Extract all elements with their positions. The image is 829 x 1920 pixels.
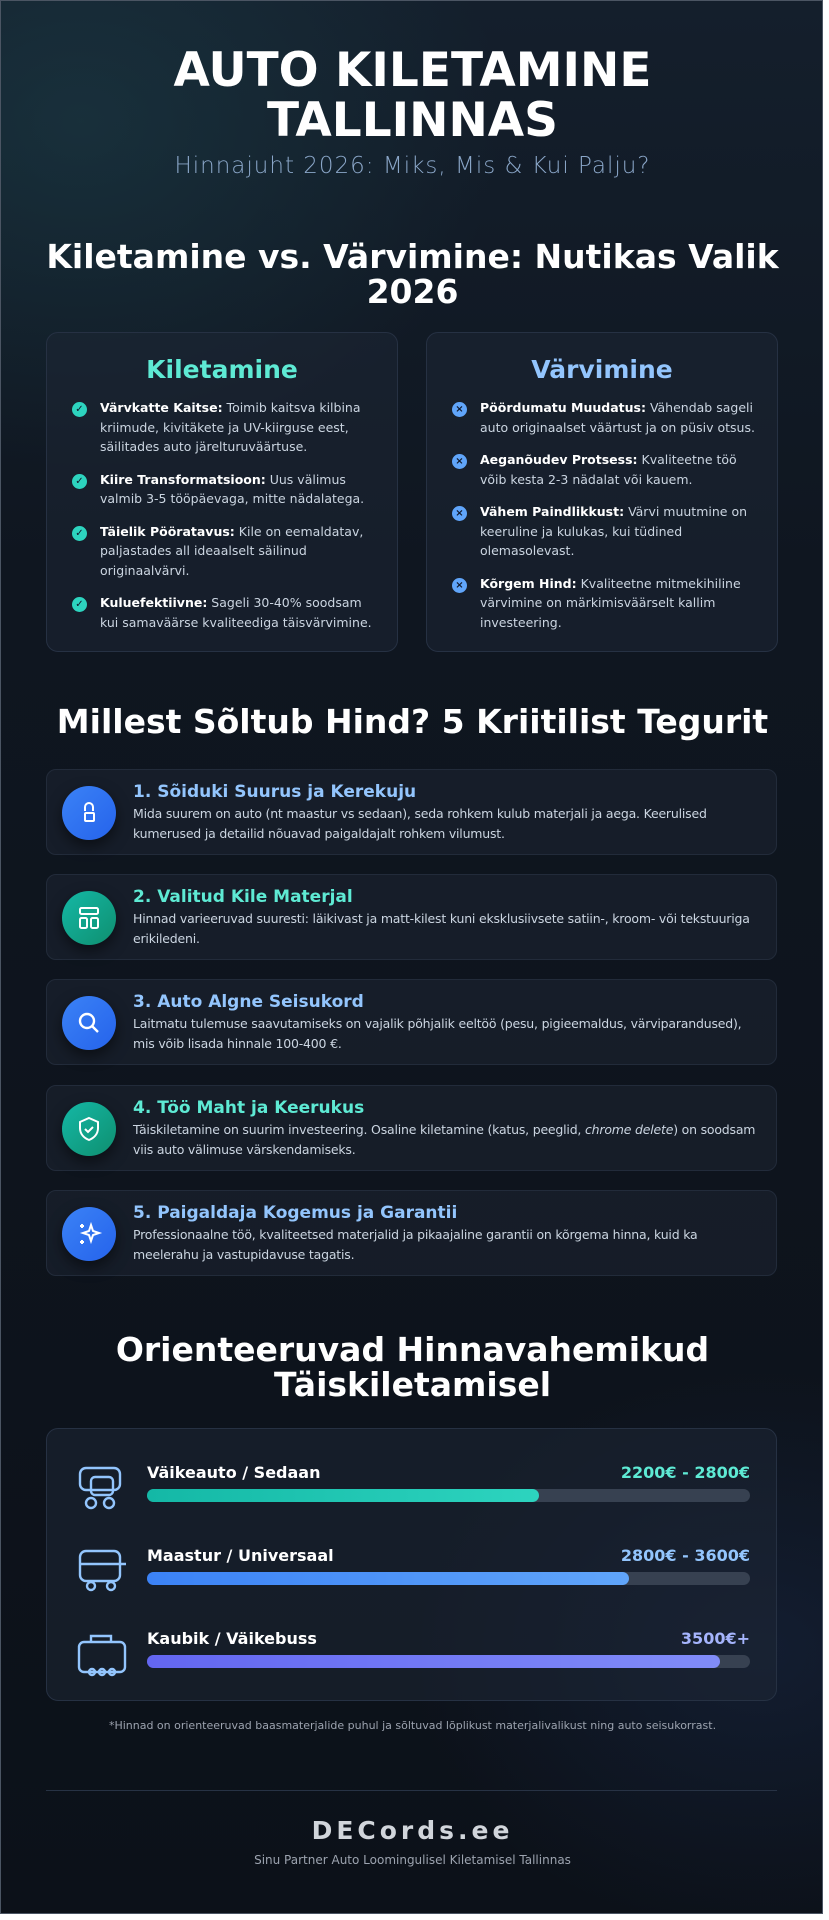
- row: kaubik: [78, 1629, 750, 1676]
- item: hind: ×: [455, 580, 464, 590]
- row: maastur: Maastur / Universaal: [147, 1546, 334, 1565]
- title: AUTO KILETAMINE: [174, 43, 651, 98]
- card: factor 1: 1. Sõiduki Suurus ja Kerekuju: [133, 782, 416, 802]
- title: TALLINNAS: [267, 93, 558, 148]
- row: kaubik: 3500€+: [681, 1629, 750, 1648]
- item: kulu: Kuluefektiivne: Sageli 30-40% soodsam kui samaväärse kvaliteediga täisvärvimine.: [100, 595, 372, 630]
- item: aeganõudev: Aeganõudev Protsess: Kvaliteetne töö võib kesta 2-3 nädalat või kauem.: [480, 452, 737, 486]
- card: factor 3: [46, 979, 777, 1065]
- footnote: *Hinnad on orienteeruvad baasmaterjalide puhul ja sõltuvad lõplikust materjalivalikust ning auto seisukorrast.: [109, 1719, 716, 1732]
- heading: prices: Täiskiletamisel: [274, 1365, 551, 1404]
- row: maastur: [78, 1546, 750, 1592]
- row: maastur: 2800€ - 3600€: [621, 1546, 750, 1565]
- icon: van: [78, 1634, 126, 1676]
- footer tagline: Sinu Partner Auto Loomingulisel Kiletamisel Tallinnas: [254, 1853, 571, 1867]
- item: pööratavus: Täielik Pööratavus: Kile on eemaldatav, paljastades all ideaalselt säilinud originaalvärvi.: [100, 524, 363, 578]
- icon: car: [78, 1466, 122, 1510]
- panel: värvimine: [426, 332, 778, 652]
- item: hind: Kõrgem Hind: Kvaliteetne mitmekihiline värvimine on märkimisväärselt kallim investeering.: [480, 576, 741, 630]
- card: factor 3: Laitmatu tulemuse saavutamiseks on vajalik põhjalik eeltöö (pesu, pigieemaldus, värviparandused), mis võib lisada hinnale 100-400 €.: [133, 1016, 741, 1051]
- heading: kiletamine: Kiletamine: [146, 355, 298, 384]
- icon: shield: [62, 1102, 116, 1156]
- title: [174, 43, 651, 148]
- heading: comparison: [46, 237, 780, 311]
- item: pöördumatu: Pöördumatu Muudatus: Vähendab sageli auto originaalset väärtust ja on püsiv otsus.: [480, 400, 755, 434]
- row: sedaan: 2200€ - 2800€: [621, 1463, 750, 1482]
- card: factor 2: [46, 874, 777, 960]
- heading: factors: Millest Sõltub Hind? 5 Kriitilist Tegurit: [57, 702, 768, 741]
- row: kaubik: Kaubik / Väikebuss: [147, 1629, 317, 1648]
- item: pöördumatu: ×: [455, 404, 464, 415]
- icon: material: [62, 891, 116, 945]
- item: kaitse: ✓: [75, 404, 84, 415]
- row: sedaan: [78, 1463, 750, 1510]
- icon: search: [62, 996, 116, 1050]
- item: aeganõudev: ×: [455, 456, 464, 467]
- card: factor 1: Mida suurem on auto (nt maastur vs sedaan), seda rohkem kulub materjali ja aega. Keerulised kumerused ja detailid nõuavad paigaldajalt rohkem vilumust.: [133, 806, 707, 841]
- panel: kiletamine: [46, 332, 398, 652]
- heading: comparison: Kiletamine vs. Värvimine: Nutikas Valik: [46, 237, 779, 276]
- icon: size: [62, 786, 116, 840]
- card: factor 5: 5. Paigaldaja Kogemus ja Garantii: [133, 1203, 457, 1223]
- item: kiire: Kiire Transformatsioon: Uus välimus valmib 3-5 tööpäevaga, mitte nädalatega.: [100, 472, 364, 506]
- card: factor 5: Professionaalne töö, kvaliteetsed materjalid ja pikaajaline garantii on kõrgema hinna, kuid ka meelerahu ja vastupidavuse tagatis.: [133, 1227, 697, 1262]
- card: factor 2: 2. Valitud Kile Materjal: [133, 887, 353, 907]
- heading: prices: Orienteeruvad Hinnavahemikud: [116, 1330, 709, 1369]
- footer brand: DECords.ee: [312, 1816, 513, 1845]
- card: factor 4: Täiskiletamine on suurim investeering. Osaline kiletamine (katus, peeglid, chrome delete) on soodsam viis auto välimuse värskendamiseks.: [133, 1122, 755, 1157]
- card: factor 2: Hinnad varieeruvad suuresti: läikivast ja matt-kilest kuni eksklusiivsete satiin-, kroom- või tekstuuriga erikiledeni.: [133, 911, 750, 946]
- item: paindlikkus: Vähem Paindlikkust: Värvi muutmine on keeruline ja kulukas, kui tüdined olemasolevast.: [480, 504, 747, 558]
- icon: suv: [78, 1550, 126, 1592]
- card: factor 1: [46, 769, 777, 855]
- icon: sparkle: [62, 1207, 116, 1261]
- heading: prices: [116, 1330, 709, 1404]
- card: factor 5: [46, 1190, 777, 1276]
- card: factor 4: 4. Töö Maht ja Keerukus: [133, 1098, 364, 1118]
- item: kiire: ✓: [75, 476, 84, 486]
- card: factor 4: [46, 1085, 777, 1171]
- item: kaitse: Värvkatte Kaitse: Toimib kaitsva kilbina kriimude, kivitäkete ja UV-kiirguse eest, säilitades auto järelturuväärtuse.: [100, 400, 361, 454]
- panel: price ranges: [46, 1428, 777, 1701]
- subtitle: Hinnajuht 2026: Miks, Mis & Kui Palju?: [174, 153, 651, 179]
- card: factor 3: 3. Auto Algne Seisukord: [133, 992, 364, 1012]
- heading: värvimine: Värvimine: [531, 355, 673, 384]
- item: paindlikkus: ×: [455, 508, 464, 519]
- item: pööratavus: ✓: [75, 528, 84, 538]
- item: kulu: ✓: [75, 599, 84, 610]
- row: sedaan: Väikeauto / Sedaan: [147, 1463, 320, 1482]
- heading: comparison: 2026: [367, 272, 458, 311]
